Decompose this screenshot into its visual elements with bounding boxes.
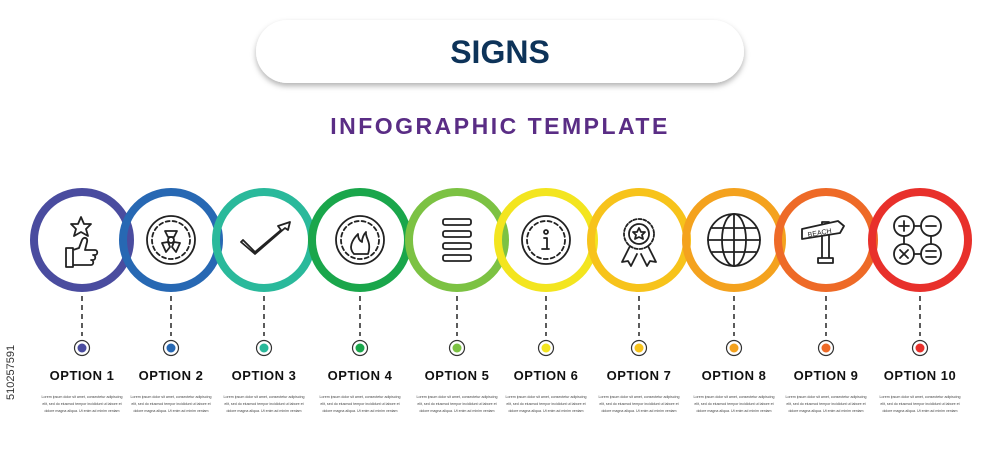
description texts: dolore magna aliqua. Ut enim ad minim veniam [419,409,495,413]
description texts: dolore magna aliqua. Ut enim ad minim veniam [322,409,398,413]
description texts: elit, sed do eiusmod tempor incididunt ut labore et [224,402,304,406]
icon: globe [708,214,760,266]
icon: radiation [147,216,195,264]
description texts: dolore magna aliqua. Ut enim ad minim veniam [788,409,864,413]
description texts: Lorem ipsum dolor sit amet, consectetur adipiscing [131,395,211,399]
description texts: Lorem ipsum dolor sit amet, consectetur adipiscing [42,395,122,399]
title pill: SIGNS [450,34,550,70]
description texts: Lorem ipsum dolor sit amet, consectetur adipiscing [224,395,304,399]
description texts [42,395,960,413]
description texts: elit, sed do eiusmod tempor incididunt ut labore et [786,402,866,406]
option labels: OPTION 10 [884,368,956,383]
side stock id: 510257591 [5,345,17,400]
description texts: dolore magna aliqua. Ut enim ad minim veniam [44,409,120,413]
description texts: dolore magna aliqua. Ut enim ad minim veniam [508,409,584,413]
description texts: Lorem ipsum dolor sit amet, consectetur adipiscing [786,395,866,399]
description texts: Lorem ipsum dolor sit amet, consectetur adipiscing [880,395,960,399]
option labels: OPTION 8 [702,368,766,383]
description texts: elit, sed do eiusmod tempor incididunt ut labore et [599,402,679,406]
option labels: OPTION 5 [425,368,489,383]
description texts: Lorem ipsum dolor sit amet, consectetur adipiscing [694,395,774,399]
option labels: OPTION 6 [514,368,578,383]
description texts: dolore magna aliqua. Ut enim ad minim veniam [226,409,302,413]
description texts: elit, sed do eiusmod tempor incididunt ut labore et [694,402,774,406]
description texts: elit, sed do eiusmod tempor incididunt ut labore et [417,402,497,406]
description texts: Lorem ipsum dolor sit amet, consectetur adipiscing [320,395,400,399]
description texts: Lorem ipsum dolor sit amet, consectetur adipiscing [417,395,497,399]
option labels: OPTION 1 [50,368,114,383]
option labels: OPTION 7 [607,368,671,383]
option labels: OPTION 2 [139,368,203,383]
option labels [50,368,956,383]
icon: thumbs up with star [66,217,97,267]
icon: check [241,222,290,254]
subtitle: INFOGRAPHIC TEMPLATE [330,113,670,139]
description texts: dolore magna aliqua. Ut enim ad minim veniam [133,409,209,413]
option labels: OPTION 9 [794,368,858,383]
description texts: elit, sed do eiusmod tempor incididunt ut labore et [320,402,400,406]
description texts: Lorem ipsum dolor sit amet, consectetur adipiscing [599,395,679,399]
icon: beach sign: BEACH [807,228,832,239]
description texts: elit, sed do eiusmod tempor incididunt ut labore et [880,402,960,406]
description texts: elit, sed do eiusmod tempor incididunt ut labore et [42,402,122,406]
icon: award ribbon [622,219,656,266]
title pill [256,20,744,83]
description texts: Lorem ipsum dolor sit amet, consectetur adipiscing [506,395,586,399]
icon: fire [336,216,384,264]
icon: stripes [443,219,471,261]
icon: info [522,216,570,264]
option labels: OPTION 3 [232,368,296,383]
description texts: dolore magna aliqua. Ut enim ad minim veniam [696,409,772,413]
rings row [34,192,968,288]
description texts: dolore magna aliqua. Ut enim ad minim veniam [601,409,677,413]
description texts: dolore magna aliqua. Ut enim ad minim veniam [882,409,958,413]
description texts: elit, sed do eiusmod tempor incididunt ut labore et [506,402,586,406]
description texts: elit, sed do eiusmod tempor incididunt ut labore et [131,402,211,406]
option labels: OPTION 4 [328,368,393,383]
icon: beach sign [802,221,844,263]
icons [66,214,941,267]
icon: math operations [894,216,941,264]
connectors and markers [74,296,928,356]
